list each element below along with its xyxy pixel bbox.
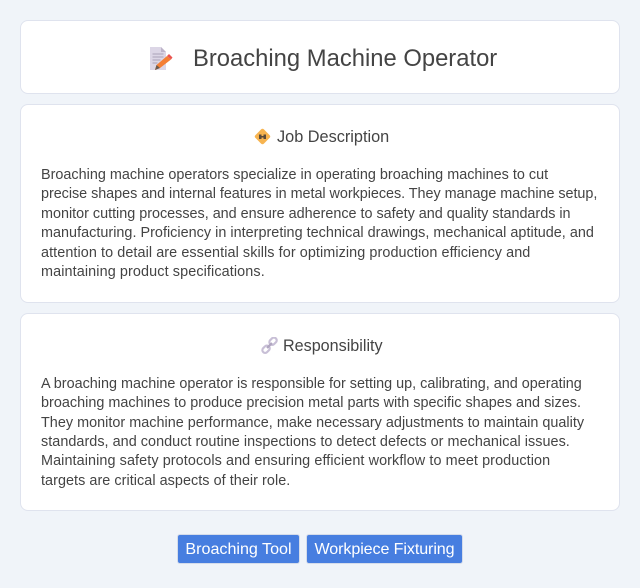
text block: job description: maintaining product specifications. — [41, 264, 265, 280]
text block: responsibility: standards, and conduct routine inspections to detect defects or mechanical issues. — [41, 434, 570, 450]
text block: job description: attention to detail are essential skills for optimizing production efficiency and — [41, 245, 530, 261]
text block: responsibility: A broaching machine operator is responsible for setting up, calibrating, and operating — [41, 376, 582, 392]
panel: job description — [20, 104, 620, 303]
text block: job description — [41, 167, 597, 280]
panel: title card — [20, 20, 620, 94]
text block: responsibility: broaching machines to produce precision metal parts with specific shapes and sizes. — [41, 395, 581, 411]
text block: job description: Broaching machine operators specialize in operating broaching machines to cut — [41, 167, 548, 183]
icon: document with pencil — [150, 47, 172, 70]
text block: responsibility: They monitor machine performance, make necessary adjustments to maintain quality — [41, 415, 584, 431]
title: Broaching Machine Operator — [193, 45, 497, 72]
tag: broaching tool: Broaching Tool — [185, 540, 292, 558]
heading: job description: Job Description — [277, 128, 389, 146]
tag: workpiece fixturing: Workpiece Fixturing — [314, 540, 454, 558]
icon: diamond sign — [254, 128, 270, 144]
text block: job description: manufacturing. Proficiency in interpreting technical drawings, mechanical aptitude, and — [41, 225, 594, 241]
heading: responsibility: Responsibility — [283, 337, 383, 355]
icon: link — [261, 337, 278, 354]
tag: workpiece fixturing — [307, 535, 462, 563]
text block: job description: precise shapes and internal features in metal workpieces. They manage machine setup, — [41, 186, 597, 202]
text block: responsibility: targets are critical aspects of their role. — [41, 473, 290, 489]
tag: broaching tool — [178, 535, 299, 563]
text block: responsibility — [41, 376, 584, 489]
text block: job description: monitor cutting processes, and ensure adherence to safety and quality standards in — [41, 206, 571, 222]
text block: responsibility: Maintaining safety protocols and ensuring efficient workflow to meet production — [41, 453, 550, 469]
panel: responsibility — [20, 313, 620, 511]
